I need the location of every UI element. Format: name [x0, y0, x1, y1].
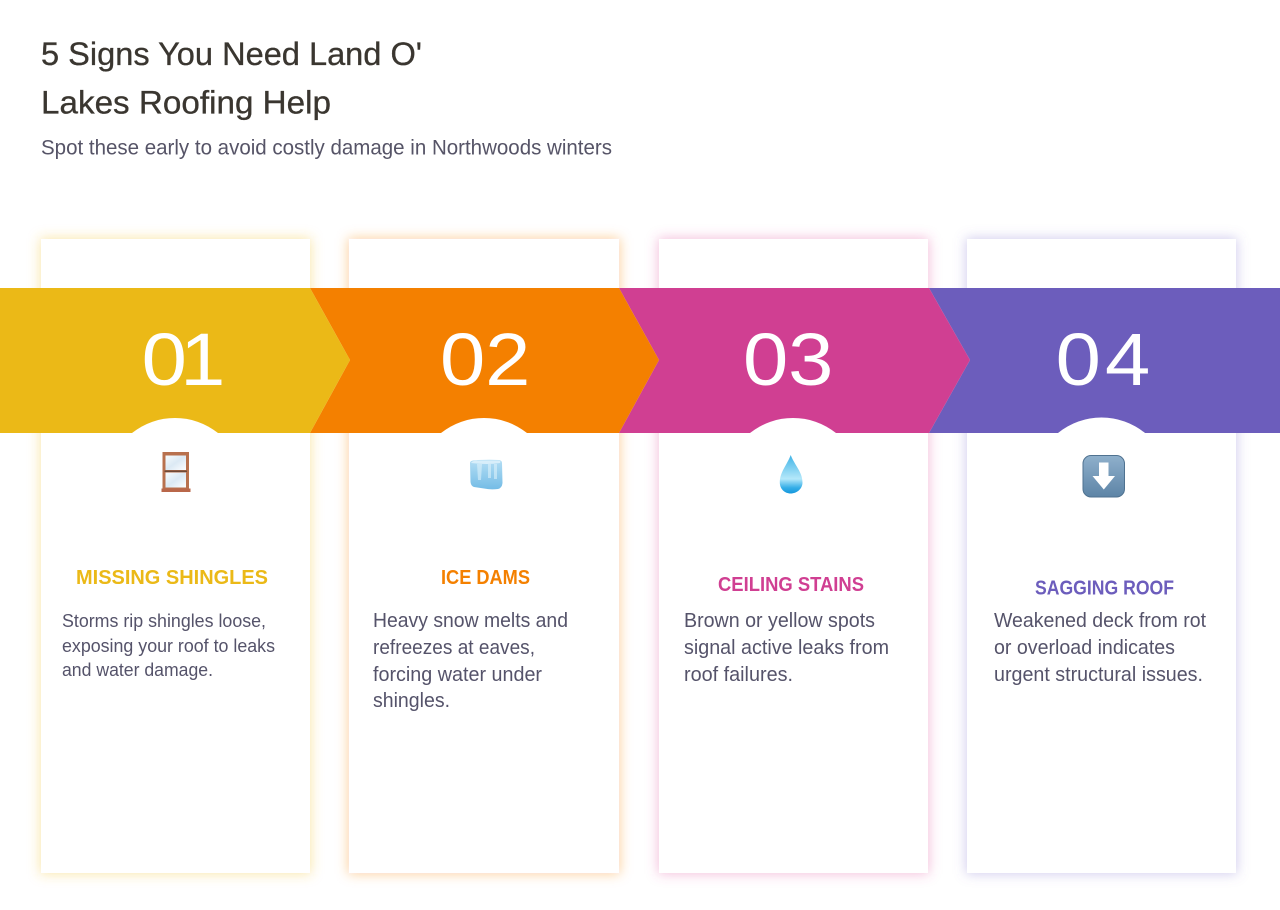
panel: missing shingles: [40, 238, 311, 874]
number 03: 03: [743, 319, 833, 401]
subtitle: Spot these early to avoid costly damage in Northwoods winters: [41, 136, 612, 160]
description: ceiling stains: roof failures.: [684, 663, 793, 686]
description: ice dams: Heavy snow melts and: [373, 609, 568, 632]
description: missing shingles: [62, 610, 275, 680]
description: missing shingles: Storms rip shingles loose,: [62, 610, 266, 631]
icon: down arrow key: [1083, 456, 1124, 497]
description: sagging roof: Weakened deck from rot: [994, 609, 1206, 632]
description: ceiling stains: [684, 609, 889, 686]
icon circle: step 02: [441, 418, 527, 433]
title: [41, 36, 422, 120]
heading: ceiling stains: CEILING STAINS: [718, 574, 864, 596]
number 02: 02: [440, 319, 530, 401]
panel: ceiling stains: [658, 238, 929, 874]
title: 5 Signs You Need Land O': [41, 36, 422, 72]
description: ice dams: refreezes at eaves,: [373, 636, 535, 659]
icon circle: step 03: [750, 418, 836, 433]
panel: ice dams: [348, 238, 620, 874]
description: missing shingles: exposing your roof to leaks: [62, 635, 275, 656]
description: missing shingles: and water damage.: [62, 659, 213, 680]
description: ice dams: shingles.: [373, 689, 450, 712]
description: ceiling stains: Brown or yellow spots: [684, 609, 875, 632]
icon circle: step 04: [1058, 418, 1145, 433]
arrow band: step 02: [310, 288, 659, 433]
icon: ice cube: [470, 460, 502, 489]
number 01: 01: [142, 319, 225, 401]
description: ice dams: forcing water under: [373, 663, 542, 686]
description: ceiling stains: signal active leaks from: [684, 636, 889, 659]
heading: ice dams: ICE DAMS: [441, 567, 530, 589]
description: ice dams: [373, 609, 568, 712]
heading: sagging roof: SAGGING ROOF: [1035, 578, 1174, 600]
title: Lakes Roofing Help: [41, 84, 331, 120]
panel: sagging roof: [966, 238, 1237, 874]
arrow band: step 03: [619, 288, 970, 433]
arrow band: step 01: [0, 288, 350, 433]
description: sagging roof: or overload indicates: [994, 636, 1175, 659]
description: sagging roof: urgent structural issues.: [994, 663, 1203, 686]
icon circle: step 01: [132, 418, 218, 433]
icon: window: [162, 452, 190, 492]
icon: water drop: [780, 455, 802, 494]
arrow band: step 04: [929, 288, 1280, 433]
description: sagging roof: [994, 609, 1206, 686]
heading: missing shingles: MISSING SHINGLES: [76, 567, 268, 589]
number 04: 04: [1056, 319, 1150, 401]
